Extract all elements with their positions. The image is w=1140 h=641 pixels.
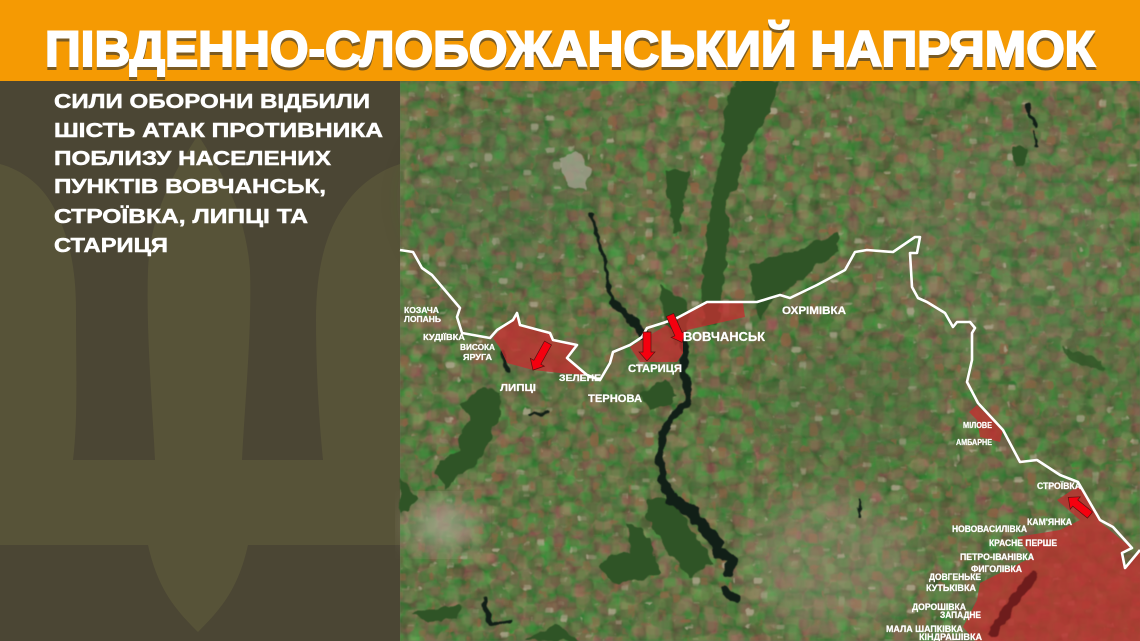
map: forests [400, 81, 1105, 641]
text block: summary: СИЛИ ОБОРОНИ ВІДБИЛИ [54, 91, 370, 113]
map texture: pale fields [400, 80, 1140, 641]
map labels: МАЛА ШАПКІВКА [886, 624, 963, 634]
map: red occupied zones [493, 303, 1140, 641]
arrow: Липці [526, 339, 555, 374]
map labels: КУТЬКІВКА [926, 583, 976, 593]
text block: summary: ПОБЛИЗУ НАСЕЛЕНИХ [54, 148, 332, 170]
map texture: brown ploughed fields [400, 80, 1140, 641]
icon: trident watermark [0, 135, 400, 632]
map labels: ТЕРНОВА [588, 393, 642, 405]
map labels: КАМ'ЯНКА [1027, 517, 1072, 527]
map: towns [409, 501, 477, 549]
map labels: ОХРІМІВКА [782, 305, 846, 317]
map labels [404, 305, 1081, 641]
map labels: ЛОПАНЬ [404, 315, 441, 324]
header banner [0, 0, 1140, 81]
map labels: ДОРОШІВКА [912, 602, 966, 612]
title: ПІВДЕННО-СЛОБОЖАНСЬКИЙ НАПРЯМОК [45, 20, 1095, 77]
title shadow: ПІВДЕННО-СЛОБОЖАНСЬКИЙ НАПРЯМОК [45, 23, 1095, 80]
map labels: КУДІЇВКА [423, 333, 465, 342]
map labels: НОВОВАСИЛІВКА [952, 524, 1027, 534]
map tint: pale fields and green zones [410, 110, 1140, 630]
map labels: ЗЕЛЕНЕ [559, 373, 601, 383]
map labels: СТАРИЦЯ [628, 363, 682, 375]
map labels: ДОВГЕНЬКЕ [929, 572, 981, 582]
map: white front line [400, 237, 1140, 568]
zone: Мілове [969, 405, 1003, 442]
text block: summary: ШІСТЬ АТАК ПРОТИВНИКА [54, 120, 383, 142]
arrow: Строївка [1063, 491, 1095, 521]
zone: Стариця [630, 325, 683, 362]
map: dark river inside red zone [993, 577, 1033, 633]
map labels: КОЗАЧА [404, 306, 439, 315]
map labels: ЛИПЦІ [500, 383, 536, 394]
map labels: ВОВЧАНСЬК [683, 329, 765, 344]
text block: summary: СТРОЇВКА, ЛИПЦІ ТА [54, 205, 308, 228]
map: rivers and lakes [485, 105, 1036, 625]
zone: Липці [493, 313, 587, 375]
zone: Вовчанськ [677, 303, 745, 340]
map labels: ВИСОКА [460, 343, 495, 352]
map labels: АМБАРНЕ [956, 438, 993, 447]
arrow: Вовчанськ [663, 312, 690, 346]
panel: satellite map [400, 80, 1140, 641]
map labels: МІЛОВЕ [963, 421, 993, 430]
map labels: ЗАПАДНЕ [940, 610, 981, 620]
zone: south-east [963, 485, 1140, 641]
arrow: Стариця [639, 332, 655, 361]
map labels: ПЕТРО-ІВАНІВКА [960, 552, 1034, 562]
map labels: КРАСНЕ ПЕРШЕ [989, 538, 1057, 548]
map texture: farm fields [400, 80, 1140, 641]
map labels: ФИГОЛІВКА [971, 564, 1022, 574]
text block: summary [54, 91, 383, 257]
text block: summary: СТАРИЦЯ [54, 235, 168, 257]
map labels: ЯРУГА [463, 353, 492, 362]
text block: summary: ПУНКТІВ ВОВЧАНСЬК, [54, 176, 326, 198]
map labels: СТРОЇВКА [1037, 481, 1081, 491]
panel: left background with trident [0, 80, 400, 641]
